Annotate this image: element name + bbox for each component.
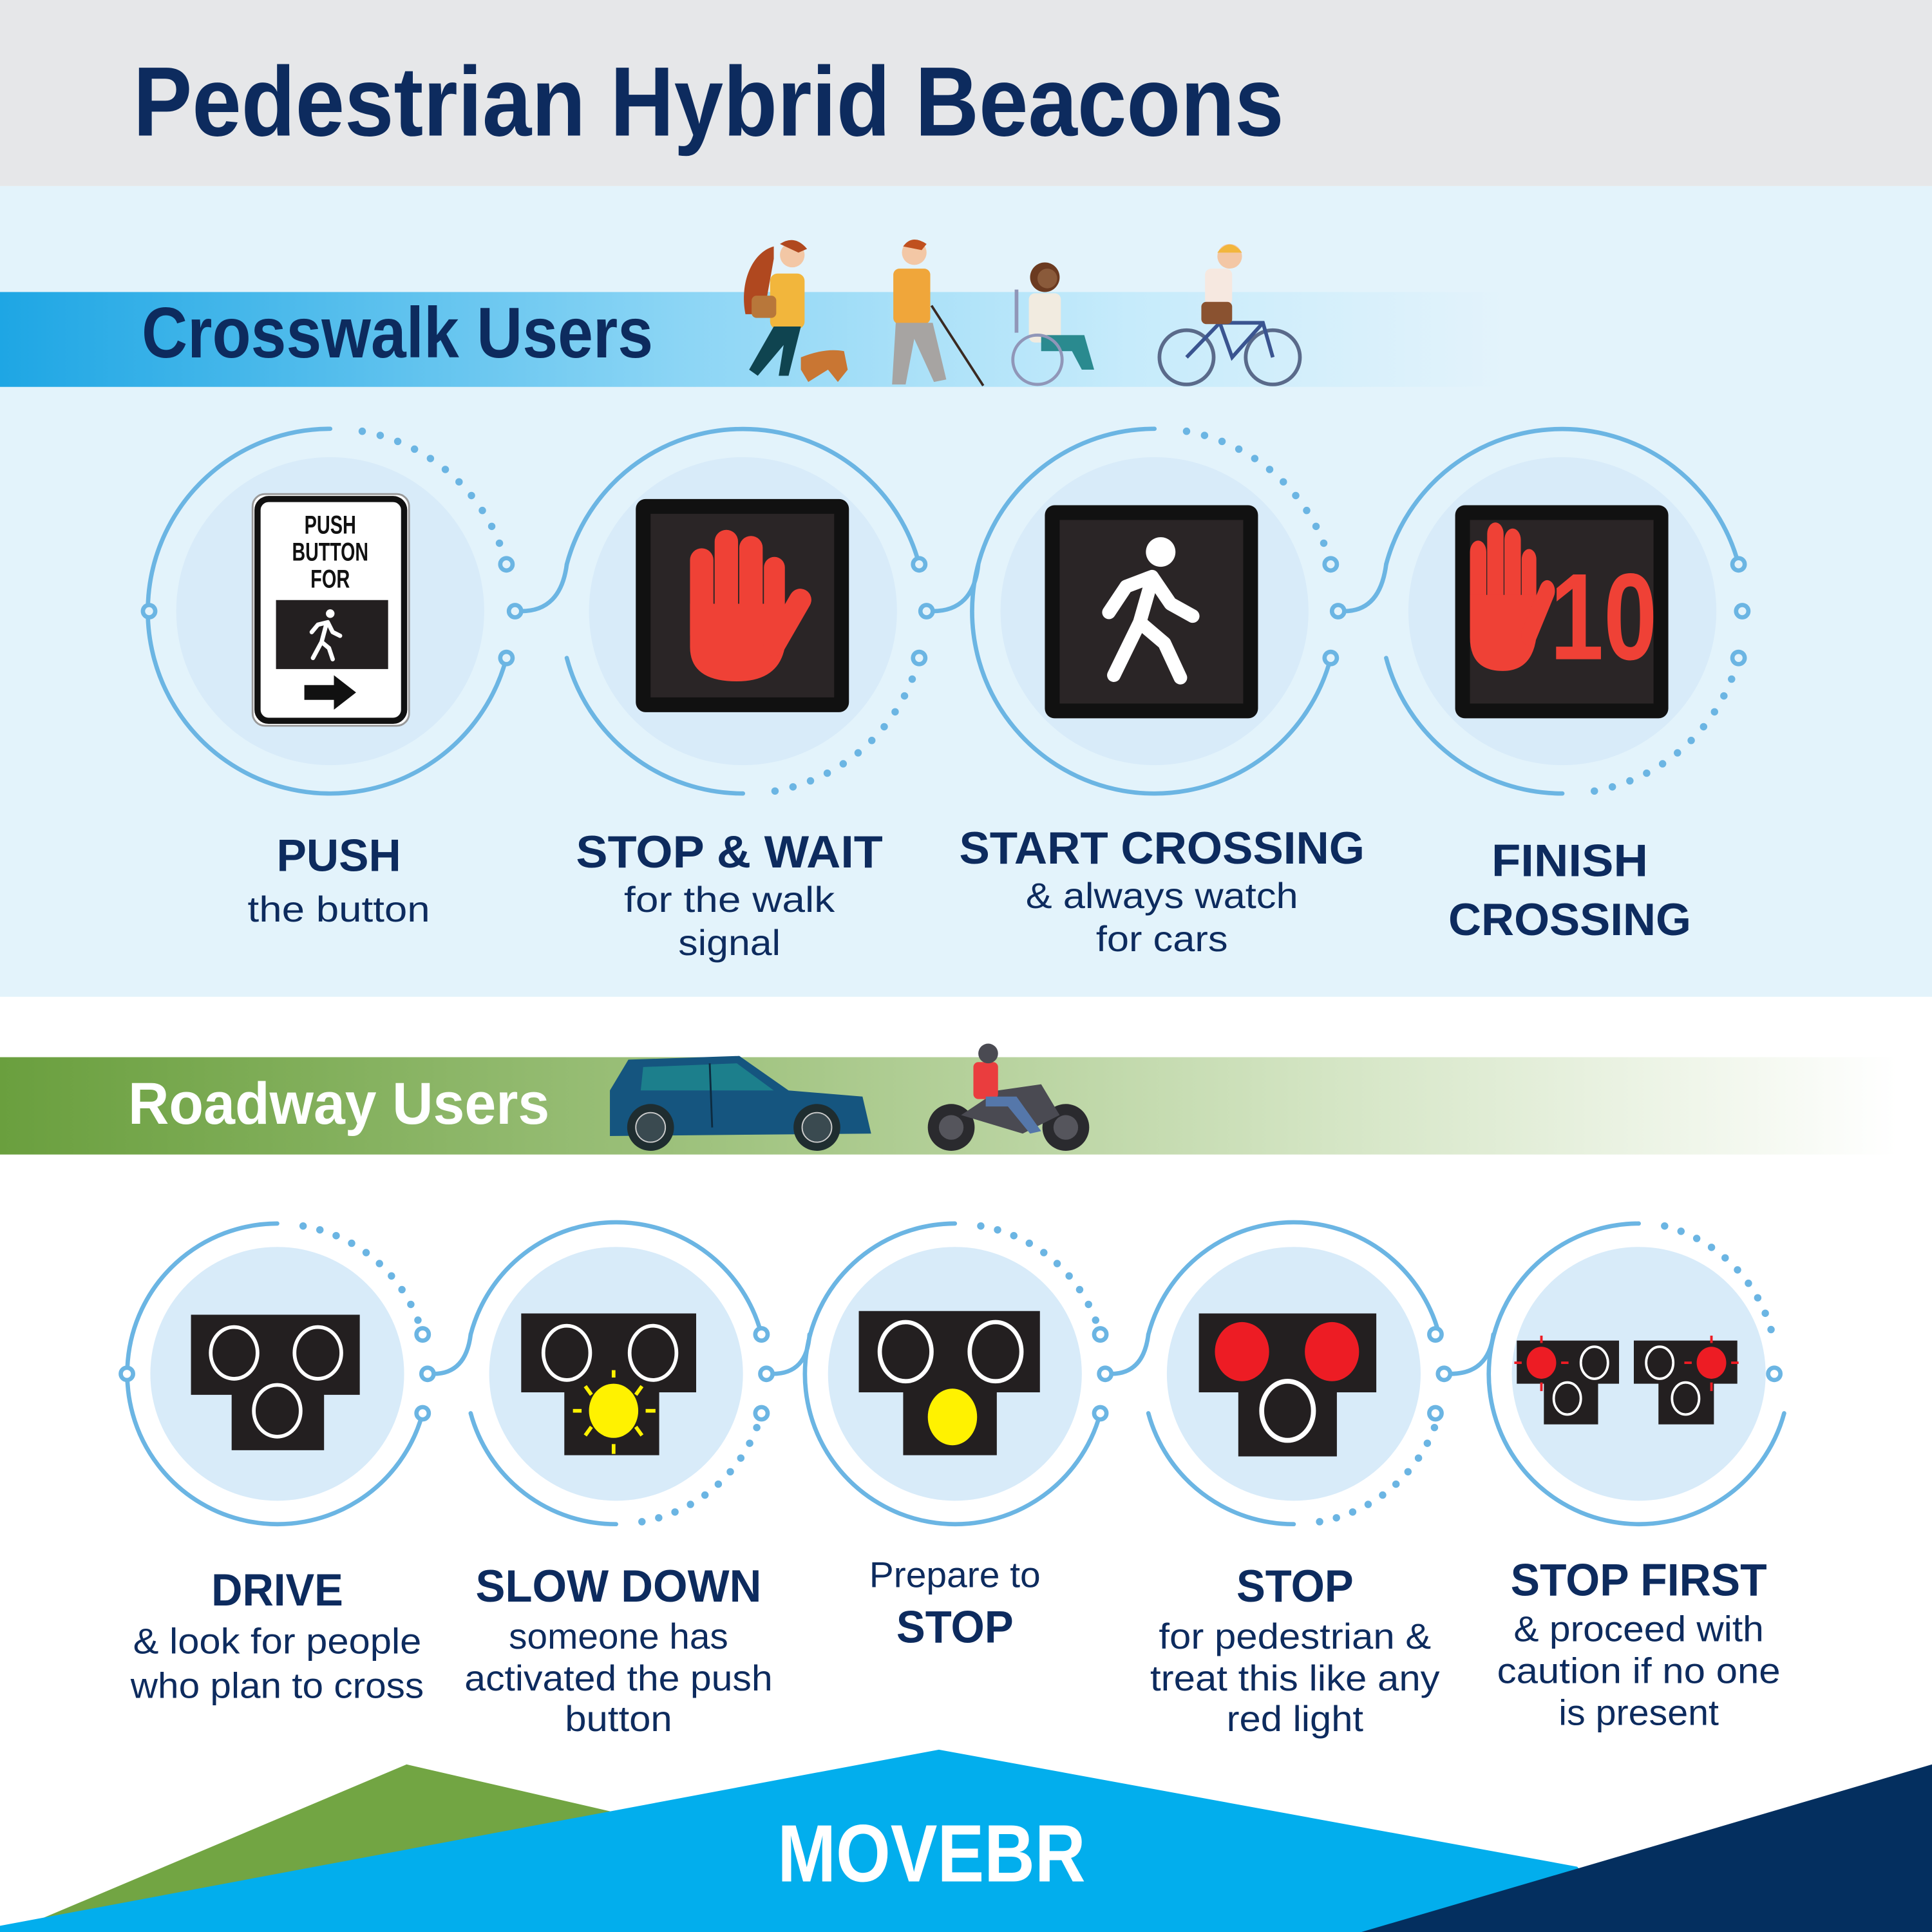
- text: push: [248, 831, 430, 929]
- title: Pedestrian Hybrid Beacons: [133, 46, 1284, 156]
- crosswalk users banner: [0, 292, 1503, 387]
- icon: alternating flashing red beacons: [1514, 1336, 1739, 1425]
- text: finish crossing: FINISH: [1492, 835, 1648, 886]
- text: push: PUSH: [277, 831, 401, 882]
- icon: countdown signal: [1455, 505, 1669, 718]
- icon: car: [610, 1056, 871, 1151]
- text: finish crossing: [1448, 835, 1691, 945]
- roadway users banner: Roadway Users: [128, 1071, 549, 1137]
- icon: woman in wheelchair: [1013, 263, 1094, 384]
- crosswalk users banner: Crosswalk Users: [142, 293, 653, 373]
- text: push: the button: [248, 889, 430, 929]
- text: start crossing: for cars: [1096, 919, 1228, 959]
- text: drive: & look for people: [133, 1622, 421, 1662]
- text: stop: treat this like any: [1150, 1658, 1440, 1698]
- icon: flashing yellow beacon: [521, 1314, 696, 1455]
- icon: countdown signal: 10: [1550, 548, 1657, 686]
- icon: solid red beacon: [1199, 1314, 1376, 1456]
- text: slow down: someone has: [509, 1616, 728, 1656]
- panel: crosswalk step circles: [143, 429, 1748, 793]
- text: slow down: [464, 1561, 773, 1739]
- text: drive: [130, 1565, 424, 1705]
- header band: [0, 0, 1932, 186]
- text: stop and wait: for the walk: [624, 880, 835, 920]
- text: stop first: STOP FIRST: [1511, 1555, 1767, 1606]
- text: stop: [1150, 1561, 1440, 1739]
- icon: push button sign: FOR: [310, 565, 350, 594]
- icon: woman walking dog: [744, 240, 848, 382]
- icon: man with cane: [892, 240, 983, 386]
- icon: push button sign: BUTTON: [292, 538, 368, 567]
- text: start crossing: & always watch: [1026, 876, 1298, 916]
- icon: walk signal: [1045, 505, 1258, 718]
- text: prepare to stop: Prepare to: [869, 1555, 1041, 1595]
- text: stop first: [1497, 1555, 1781, 1733]
- text: stop: red light: [1227, 1699, 1363, 1739]
- text: prepare to stop: STOP: [896, 1602, 1014, 1653]
- text: drive: DRIVE: [211, 1565, 343, 1616]
- icon: solid yellow beacon: [859, 1311, 1040, 1455]
- panel: crosswalk users background: [0, 186, 1932, 997]
- logo: MOVEBR: MOVEBR: [777, 1808, 1086, 1899]
- text: finish crossing: CROSSING: [1448, 895, 1691, 945]
- icon: cyclist: [1159, 244, 1300, 384]
- icon: stop hand signal: [636, 499, 849, 712]
- text: start crossing: [959, 823, 1365, 959]
- text: slow down: button: [565, 1699, 672, 1739]
- icon: push button sign: PUSH: [305, 510, 356, 539]
- text: stop first: & proceed with: [1513, 1609, 1764, 1649]
- text: stop and wait: STOP & WAIT: [576, 827, 883, 878]
- icon: push button sign: [252, 494, 409, 726]
- icon: dark beacon: [191, 1314, 360, 1450]
- text: stop: STOP: [1236, 1561, 1354, 1612]
- roadway users banner: [0, 1057, 1897, 1155]
- text: stop: for pedestrian &: [1159, 1616, 1431, 1656]
- text: slow down: SLOW DOWN: [476, 1561, 761, 1612]
- text: stop and wait: signal: [678, 923, 781, 963]
- text: stop and wait: [576, 827, 883, 963]
- text: prepare to stop: [869, 1555, 1041, 1653]
- icon: motorcycle: [928, 1044, 1089, 1151]
- text: drive: who plan to cross: [130, 1665, 424, 1705]
- panel: roadway step circles: [121, 1222, 1784, 1524]
- text: stop first: caution if no one: [1497, 1651, 1781, 1691]
- text: start crossing: START CROSSING: [959, 823, 1365, 874]
- text: slow down: activated the push: [464, 1658, 773, 1698]
- text: stop first: is present: [1558, 1693, 1719, 1733]
- footer mountains: [0, 1750, 1932, 1932]
